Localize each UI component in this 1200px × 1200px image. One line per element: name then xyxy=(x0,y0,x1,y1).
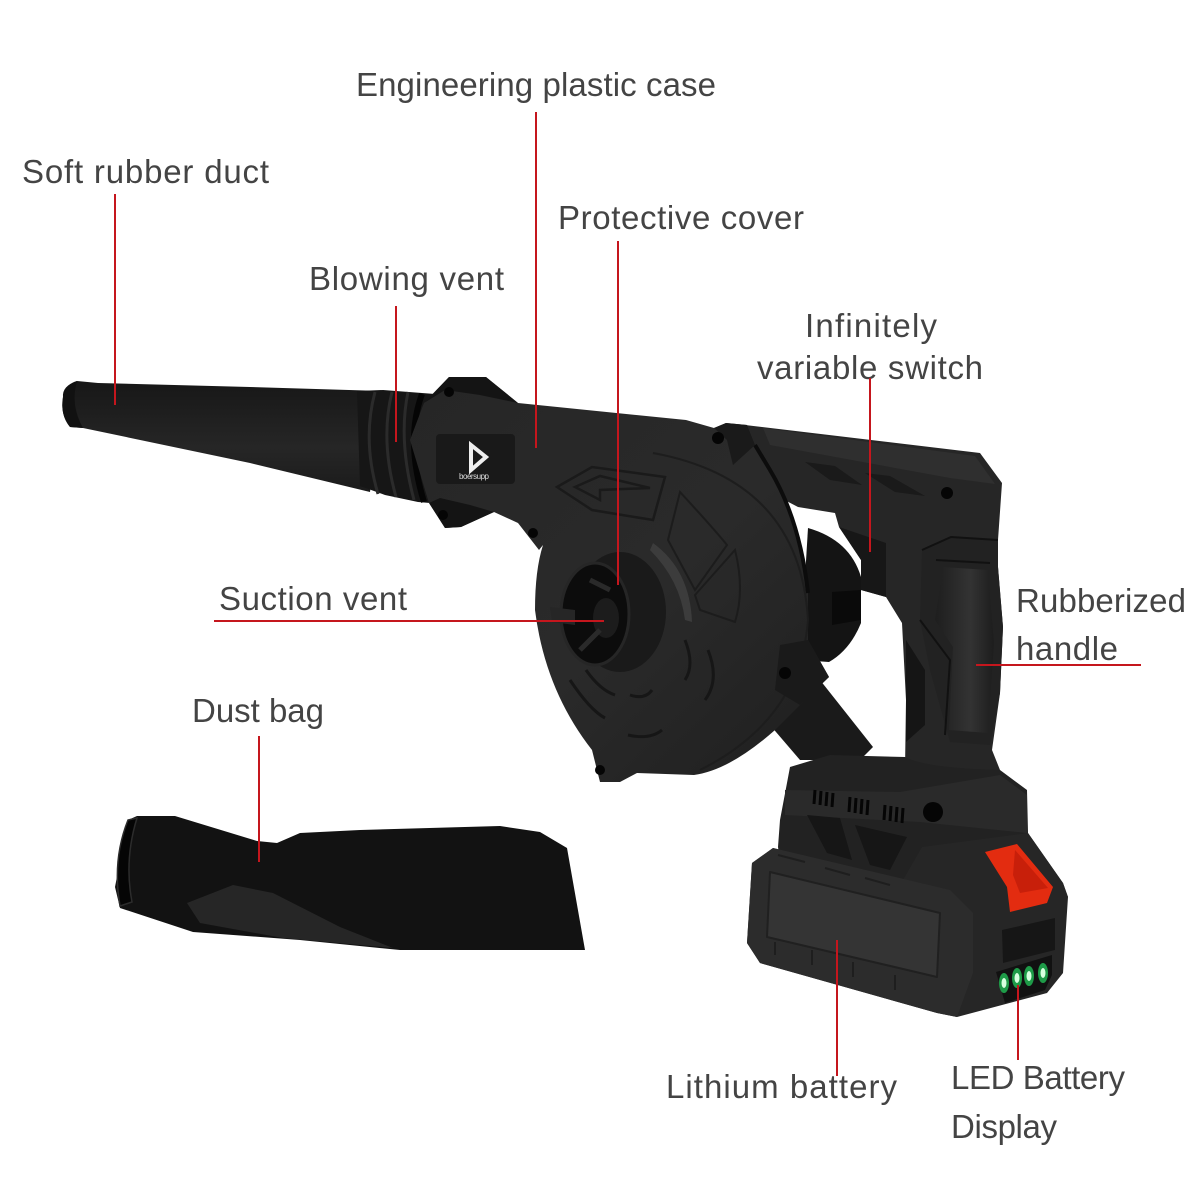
label: Rubberized handle: Rubberized xyxy=(1016,582,1186,619)
label: LED Battery Display xyxy=(951,985,1126,1145)
icon: blower product xyxy=(62,377,1068,1017)
support strut xyxy=(770,680,873,760)
handle top highlight xyxy=(763,428,995,484)
fan disc line xyxy=(653,453,808,770)
housing right edge xyxy=(755,445,808,593)
duct collar xyxy=(357,390,435,503)
label: Suction vent: Suction vent xyxy=(219,580,407,617)
rubberized grip xyxy=(920,537,1003,745)
handle xyxy=(745,425,1003,770)
label: Engineering plastic case: Engineering plastic case xyxy=(356,66,716,103)
icon: logo mark: boersupp xyxy=(459,472,490,481)
label: Soft rubber duct: Soft rubber duct xyxy=(22,153,269,190)
label: Rubberized handle: handle xyxy=(1016,630,1118,667)
label: Protective cover: Protective cover xyxy=(558,199,804,236)
soft rubber duct xyxy=(62,381,383,492)
battery lower xyxy=(747,833,1068,1017)
suction vent xyxy=(550,543,692,672)
label: Infinitely variable switch xyxy=(757,307,983,552)
icon: dust bag xyxy=(115,816,585,950)
label: Blowing vent: Blowing vent xyxy=(309,260,504,297)
label: Lithium battery: Lithium battery xyxy=(666,1068,898,1105)
battery symbol panel xyxy=(1002,918,1055,963)
trigger switch xyxy=(839,527,886,597)
label: Infinitely variable switch: Infinitely xyxy=(805,307,938,344)
battery upper xyxy=(778,755,1068,900)
logo panel xyxy=(436,434,515,484)
label: Infinitely variable switch: variable switch xyxy=(757,349,983,386)
LED display xyxy=(996,955,1052,1003)
flange right xyxy=(714,423,755,465)
rear motor housing xyxy=(800,528,861,662)
label: Dust bag: Dust bag xyxy=(192,692,324,729)
label: LED Battery Display: Display xyxy=(951,1108,1058,1145)
red release button xyxy=(985,844,1053,912)
fan segments xyxy=(668,492,740,622)
label: Rubberized handle xyxy=(976,582,1186,667)
battery vents xyxy=(814,790,903,823)
arrow mark xyxy=(557,467,665,520)
icon: logo mark xyxy=(459,445,490,481)
housing body xyxy=(410,377,829,782)
dark neck outline xyxy=(424,377,518,528)
label: LED Battery Display: LED Battery xyxy=(951,1059,1126,1096)
